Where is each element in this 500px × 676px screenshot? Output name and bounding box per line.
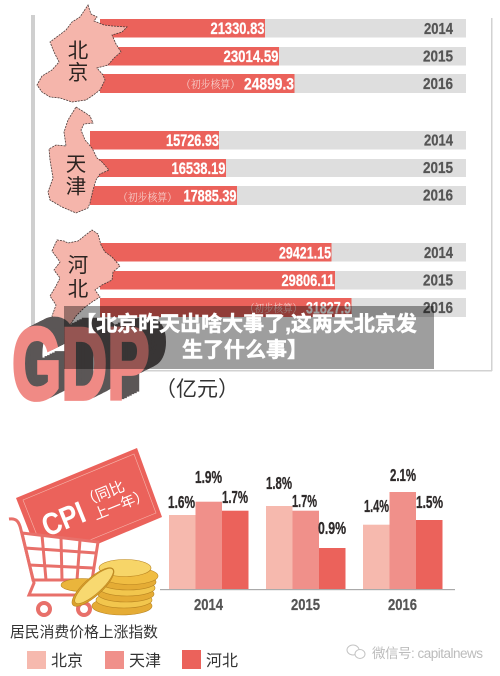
CPI caption: 居民消费价格上涨指数 — [10, 624, 158, 641]
bar chart: CPI: 1.6% — [168, 492, 195, 512]
icon: shopping cart — [9, 519, 98, 615]
bar group: Hebei GDP: 29806.11 — [282, 271, 334, 290]
CPI tag: 上一年） — [91, 486, 151, 524]
panel: GDP frame — [31, 15, 492, 372]
bar chart: CPI: 2015 — [291, 597, 320, 614]
bar chart: CPI — [160, 465, 455, 614]
map: Beijing: 京 — [68, 62, 88, 84]
heading: GDP 3D letters: GDP — [24, 301, 162, 416]
watermark: 微信号: capitalnews — [372, 646, 483, 661]
bar group: Hebei GDP: （初步核算） — [245, 301, 302, 315]
map: Hebei: 河 — [68, 254, 88, 277]
unit label: （亿元） — [155, 378, 239, 401]
heading: GDP 3D letters — [12, 298, 167, 422]
bar group: Beijing GDP: 24899.3 — [244, 74, 294, 94]
CPI tag: （同比 — [79, 478, 127, 511]
bar group: Hebei GDP — [100, 243, 466, 318]
map: Tianjin: 津 — [66, 176, 86, 198]
heading: GDP 3D letters: GDP — [12, 307, 150, 422]
heading: GDP 3D letters: GDP — [17, 305, 155, 419]
map: Hebei: 北 — [68, 278, 88, 301]
bar chart: CPI: 1.7% — [292, 491, 317, 511]
bar group: Tianjin GDP: 15726.93 — [166, 131, 219, 150]
legend: 天津 — [129, 652, 161, 670]
bar group: Tianjin GDP: 2014 — [424, 132, 453, 150]
legend: 北京 — [51, 652, 83, 670]
bar group: Beijing GDP: 23014.59 — [224, 47, 278, 66]
map: Tianjin: 天 — [66, 153, 86, 176]
heading: GDP 3D letters: GDP — [27, 300, 165, 414]
heading: GDP 3D letters: GDP — [22, 302, 160, 417]
heading: GDP 3D letters: GDP — [29, 298, 167, 413]
bar chart: CPI: 1.9% — [195, 467, 222, 487]
bar chart: CPI: 1.8% — [266, 473, 292, 493]
bar group: Tianjin GDP: 2016 — [423, 188, 453, 204]
bar group: Beijing GDP: 2016 — [423, 76, 453, 93]
map: Beijing: 北 — [68, 40, 88, 62]
heading: GDP 3D letters: GDP — [14, 306, 152, 421]
CPI tag: CPI — [37, 495, 90, 543]
bar group: Beijing GDP: 2015 — [423, 48, 453, 66]
map: Tianjin — [48, 107, 109, 213]
bar group: Beijing GDP: 2014 — [424, 21, 453, 38]
bar chart: CPI: 1.7% — [222, 487, 248, 507]
bar group: Tianjin GDP: 17885.39 — [184, 186, 236, 206]
CPI tag — [16, 448, 162, 567]
bar group: Tianjin GDP: 16538.19 — [172, 159, 226, 178]
bar group: Tianjin GDP: （初步核算） — [118, 190, 177, 204]
bar chart: CPI: 1.4% — [364, 496, 389, 516]
title banner: 生了什么事】 — [182, 338, 308, 362]
bar chart: CPI: 2.1% — [390, 465, 416, 485]
bar chart: CPI: 1.5% — [416, 492, 443, 512]
bar group: Tianjin GDP: 2015 — [423, 160, 453, 177]
bar group: Beijing GDP — [100, 19, 466, 94]
bar group: Tianjin GDP — [90, 131, 466, 206]
bar group: Beijing GDP: （初步核算） — [181, 77, 240, 91]
heading: GDP 3D letters: GDP — [19, 304, 157, 418]
bar group: Hebei GDP: 2014 — [424, 245, 453, 262]
bar group: Beijing GDP: 21330.83 — [210, 19, 264, 38]
bar group: Hebei GDP: 2016 — [423, 300, 453, 317]
bar chart: CPI: 2014 — [194, 597, 223, 614]
icon: gold coins — [61, 560, 158, 615]
legend — [27, 650, 238, 670]
bar group: Hebei GDP: 29421.15 — [279, 244, 331, 262]
bar group: Hebei GDP: 31827.9 — [306, 298, 351, 318]
map: Beijing — [37, 5, 127, 102]
title banner — [64, 306, 434, 369]
bar chart: CPI: 2016 — [388, 597, 417, 614]
bar chart: CPI: 0.9% — [318, 518, 346, 538]
title banner: 【北京昨天出啥大事了,这两天北京发 — [75, 312, 417, 336]
map: Hebei — [50, 230, 120, 330]
bar group: Hebei GDP: 2015 — [423, 272, 453, 290]
legend: 河北 — [206, 652, 238, 670]
